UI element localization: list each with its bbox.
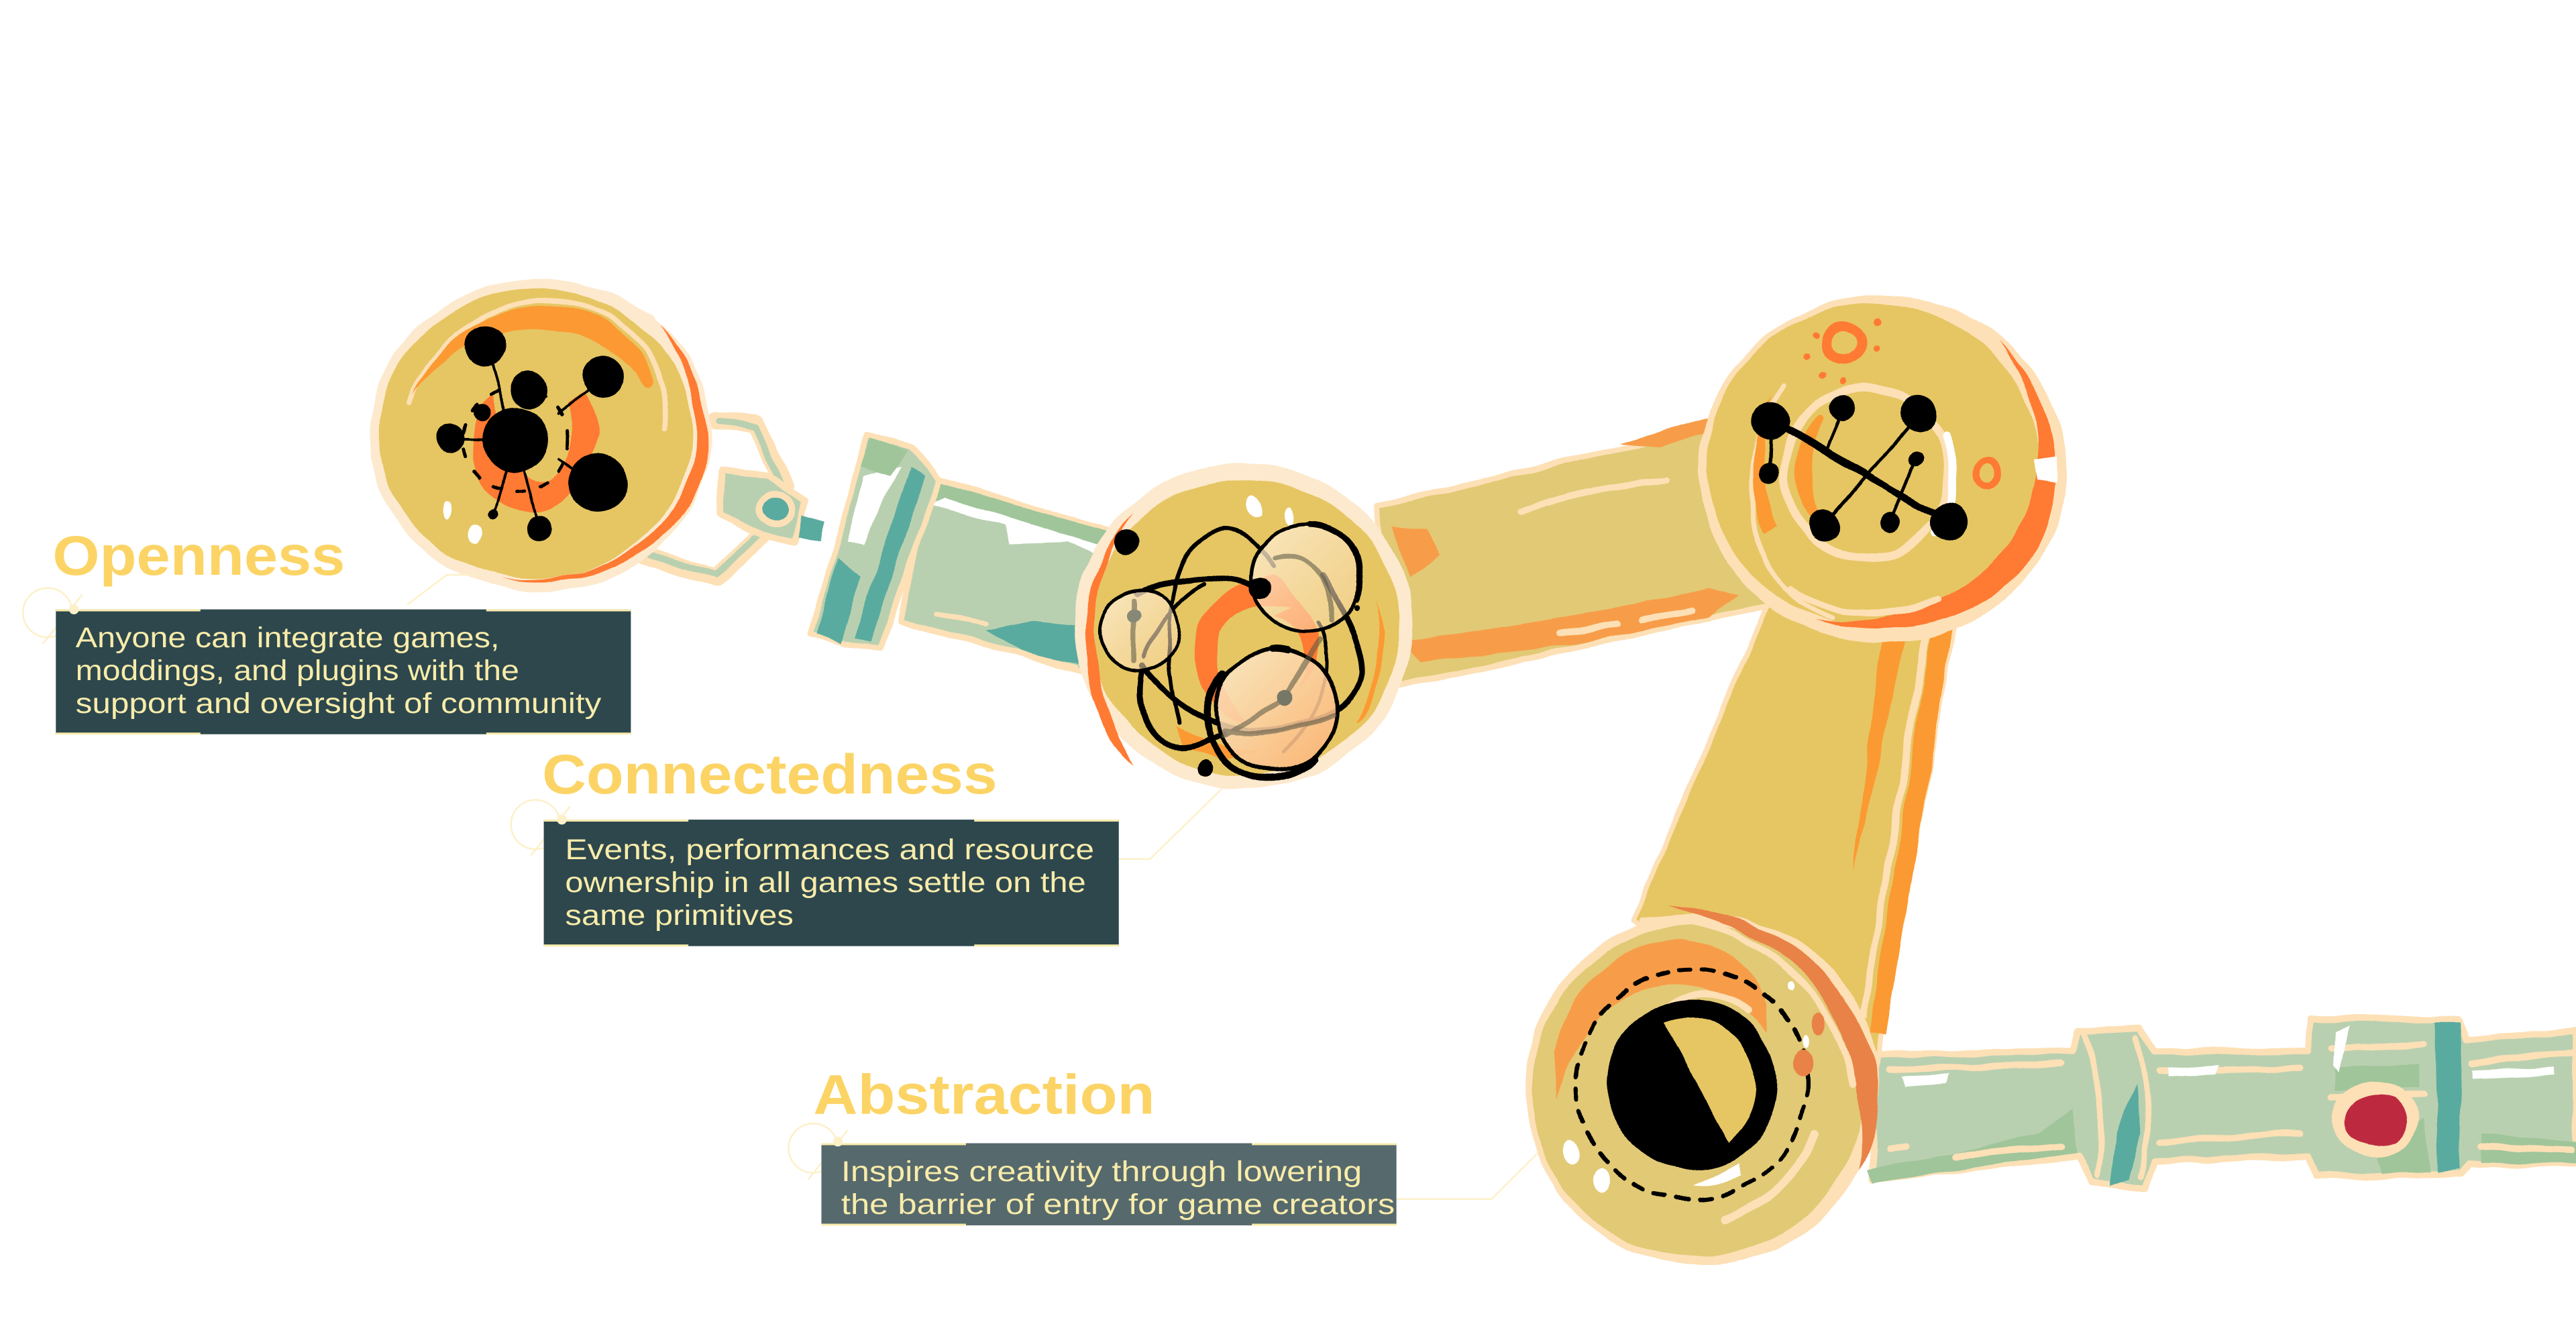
base pipe	[1868, 1018, 2576, 1188]
text box: connectedness	[544, 820, 1119, 946]
text box: openness	[56, 610, 631, 734]
upper arm	[1377, 417, 1774, 687]
text box: abstraction: the barrier of entry for game creators	[841, 1188, 1395, 1221]
heading: abstraction: Abstraction	[813, 1063, 1155, 1125]
connector: openness	[23, 575, 476, 644]
callout: openness	[23, 524, 631, 734]
icon: orbit network	[1101, 524, 1362, 778]
text box: connectedness: Events, performances and resource	[565, 834, 1094, 866]
flange	[812, 434, 940, 647]
heading: openness: Openness	[52, 524, 345, 587]
text box: connectedness: ownership in all games settle on the	[565, 867, 1086, 899]
callout: connectedness	[511, 743, 1222, 946]
gripper claw	[644, 421, 824, 578]
text box: connectedness: same primitives	[565, 899, 794, 932]
joint: abstraction	[1525, 907, 1880, 1265]
icon: molecule network	[435, 326, 627, 539]
illustration: robot arm	[370, 279, 2576, 1265]
joint: connectedness	[1075, 463, 1413, 789]
lower arm	[1633, 604, 1955, 1084]
callout: abstraction	[789, 1063, 1538, 1225]
joint: openness	[370, 279, 711, 592]
text box: abstraction	[821, 1143, 1397, 1225]
text box: openness: Anyone can integrate games,	[76, 622, 499, 654]
connector: abstraction	[789, 1123, 1538, 1199]
icon: crossed nodes	[1752, 394, 1968, 541]
heading: connectedness: Connectedness	[542, 743, 998, 806]
joint: shoulder	[1699, 296, 2067, 644]
text box: abstraction: Inspires creativity through lowering	[841, 1156, 1362, 1188]
text box: openness: support and oversight of community	[76, 687, 602, 720]
text box: openness: moddings, and plugins with the	[76, 655, 519, 687]
connector: connectedness	[511, 789, 1222, 859]
tube: teal forearm	[900, 476, 1124, 673]
icon: half disc	[1607, 999, 1778, 1170]
icon: red button	[2333, 1081, 2418, 1156]
